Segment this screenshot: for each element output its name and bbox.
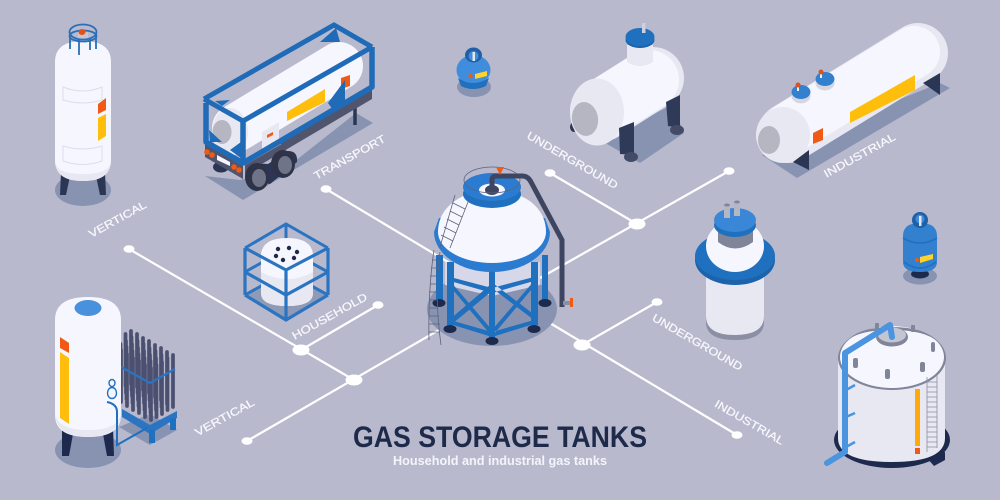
label: industrial (right): INDUSTRIAL [712,398,786,448]
label: vertical (bottom): VERTICAL [193,397,257,439]
icon: bottom-left vertical tank with rod bundle [55,297,177,468]
icon: small blue cylinder top [456,48,491,97]
support structure [448,277,536,337]
icon: bulb underground tank [695,200,775,340]
icon: central spherical gas tank [427,167,573,346]
label: underground (right): UNDERGROUND [650,312,744,374]
icon: large storage tank [827,323,950,468]
icon: vertical tank top-left [55,24,111,206]
subtitle: Household and industrial gas tanks [393,454,607,468]
rod bundle [120,331,173,420]
label: underground (top): UNDERGROUND [524,130,620,192]
title: GAS STORAGE TANKS [353,421,647,454]
icon: industrial horizontal tank [756,52,950,178]
flowchart connector lines [124,167,742,445]
icon: transport tank trailer [204,25,373,200]
label: transport: TRANSPORT [312,133,388,183]
ladder [429,195,468,345]
icon: horizontal underground tank [570,23,684,163]
icon: small blue cylinder right [903,212,937,284]
label: industrial (top): INDUSTRIAL [822,131,898,181]
icon: household cube tank [245,224,328,320]
label: vertical (top): VERTICAL [87,199,149,241]
label: household: HOUSEHOLD [290,291,370,343]
